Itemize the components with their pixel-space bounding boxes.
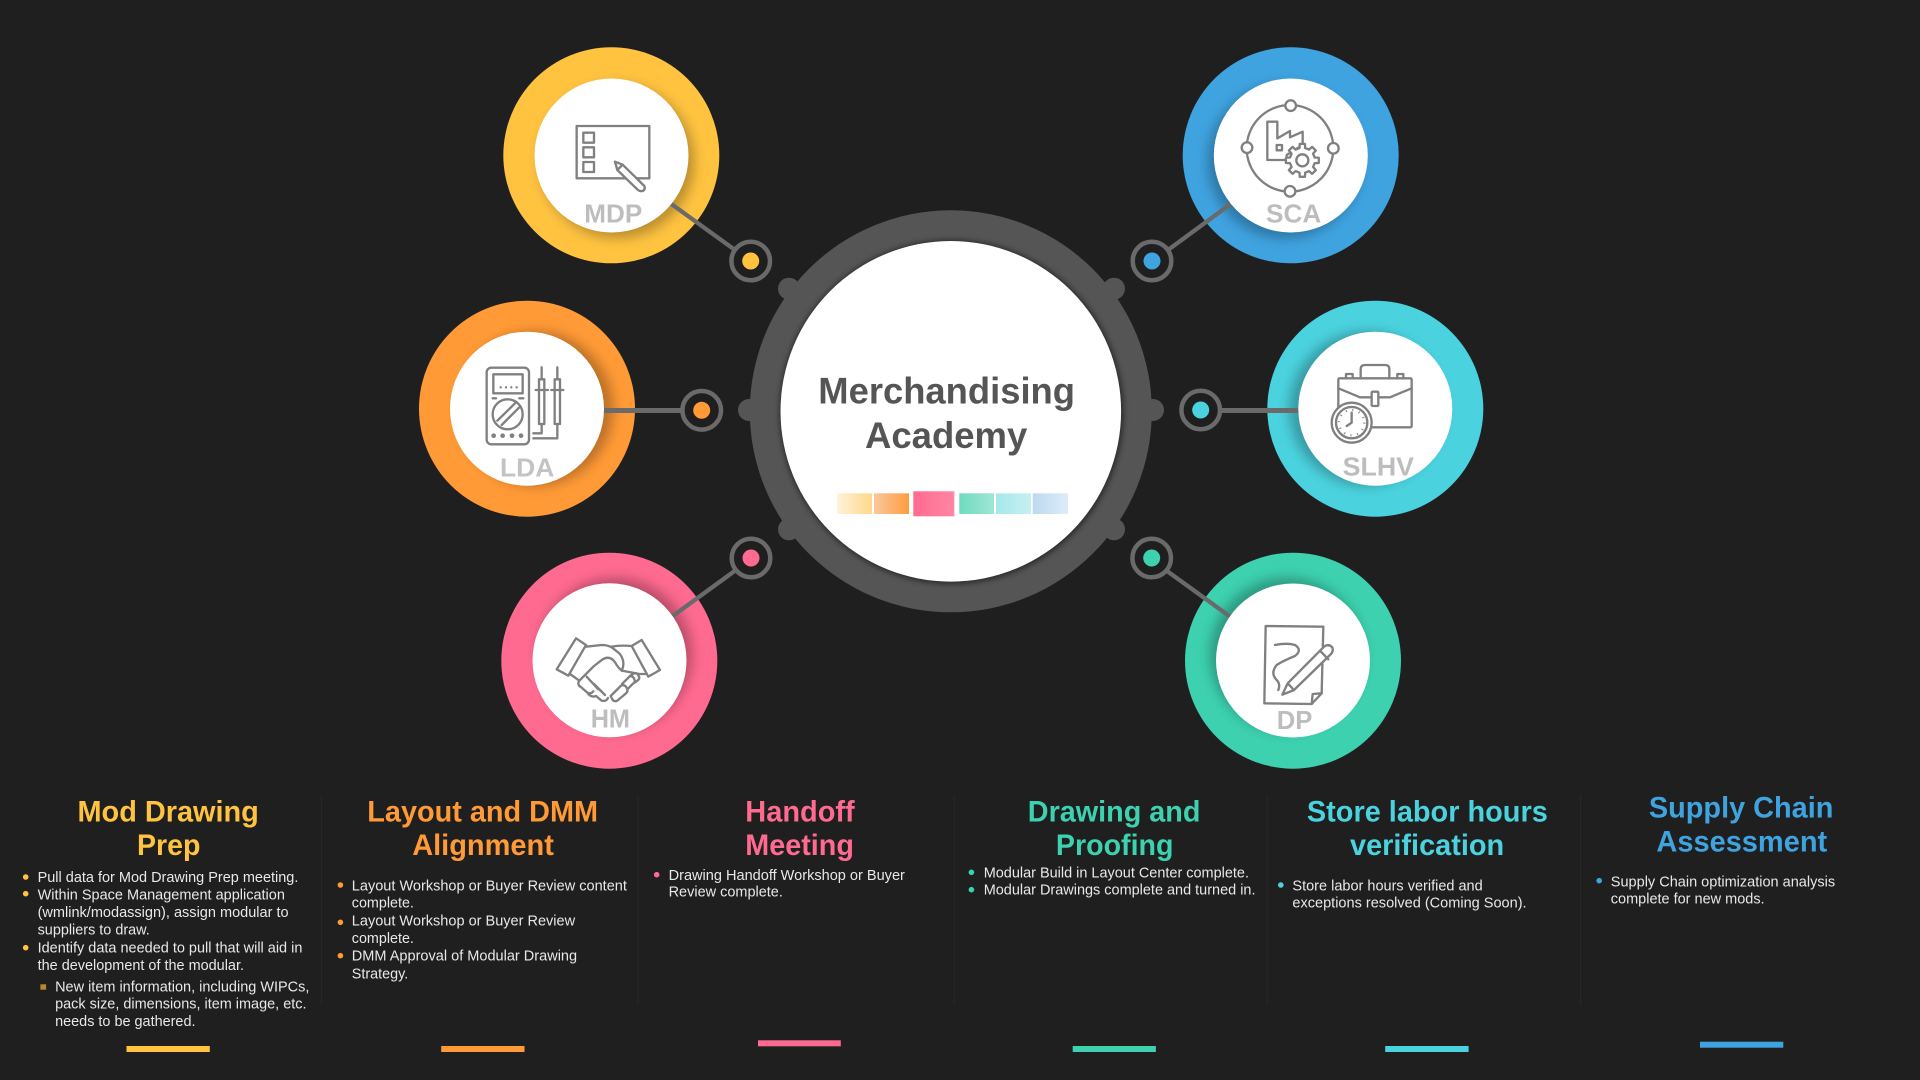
bullet list: DMM Approval of Modular Drawing xyxy=(352,949,577,965)
label: SLHV: SLHV xyxy=(1343,451,1415,481)
icon: tablet with stylus xyxy=(577,126,649,191)
panel: Layout and DMM Alignment xyxy=(338,796,627,1052)
icon: signed document with pen xyxy=(1264,626,1333,704)
node: MDP xyxy=(503,47,770,280)
bullet list: (wmlink/modassign), assign modular to xyxy=(38,905,289,921)
heading: Store labor hours verification: Store labor hours xyxy=(1307,796,1548,829)
bullet list: Supply Chain optimization analysis xyxy=(1611,875,1835,891)
bullet list: Store labor hours verified and xyxy=(1292,879,1483,895)
bullet list: Pull data for Mod Drawing Prep meeting. xyxy=(38,870,298,886)
heading: Supply Chain Assessment: Supply Chain xyxy=(1649,791,1833,824)
bullet list: needs to be gathered. xyxy=(55,1014,195,1030)
bullet list: Review complete. xyxy=(669,885,783,901)
bullet list: suppliers to draw. xyxy=(38,923,150,939)
connector dot: HM xyxy=(732,539,770,577)
bullet list: Layout Workshop or Buyer Review content xyxy=(352,879,627,895)
accent bar xyxy=(126,1046,210,1052)
accent bar xyxy=(758,1040,841,1046)
bullet list: Strategy. xyxy=(352,966,408,982)
connector dot: LDA xyxy=(682,391,721,430)
panel: Supply Chain Assessment xyxy=(1596,791,1835,1048)
label: DP: DP xyxy=(1277,705,1312,735)
heading: Layout and DMM Alignment: Alignment xyxy=(412,829,554,862)
panel: Handoff Meeting xyxy=(654,796,905,1046)
heading: Drawing and Proofing: Proofing xyxy=(1056,829,1174,862)
hub ring with knobs xyxy=(738,210,1164,612)
accent bar xyxy=(1073,1046,1156,1052)
label: MDP: MDP xyxy=(584,199,642,229)
node: HM xyxy=(501,539,770,769)
bullet list: Drawing Handoff Workshop or Buyer xyxy=(669,868,905,884)
bullet list: Modular Drawings complete and turned in. xyxy=(984,882,1256,898)
bullet list: the development of the modular. xyxy=(38,958,244,974)
connector dot: DP xyxy=(1132,539,1171,577)
connector: HM xyxy=(670,570,736,618)
connector: MDP xyxy=(670,203,735,250)
bullet list: Layout Workshop or Buyer Review xyxy=(352,913,576,929)
accent bar xyxy=(441,1046,524,1052)
heading: Drawing and Proofing: Drawing and xyxy=(1028,796,1200,829)
bullet list: exceptions resolved (Coming Soon). xyxy=(1292,895,1527,911)
bullet list: New item information, including WIPCs, xyxy=(55,980,309,996)
connector dot: SLHV xyxy=(1181,391,1220,429)
heading: Handoff Meeting: Handoff xyxy=(745,796,856,829)
central hub: Merchandising Academy xyxy=(738,210,1164,612)
node: SCA xyxy=(1133,47,1399,280)
heading: Supply Chain Assessment: Assessment xyxy=(1656,825,1827,858)
node: SLHV xyxy=(1181,301,1483,517)
heading: Handoff Meeting: Meeting xyxy=(745,829,854,862)
panel: Mod Drawing Prep xyxy=(23,796,309,1052)
node: DP xyxy=(1132,539,1401,769)
heading: Mod Drawing Prep: Prep xyxy=(137,829,200,862)
label: LDA: LDA xyxy=(500,453,555,483)
bullet list: pack size, dimensions, item image, etc. xyxy=(55,996,306,1012)
bullet list xyxy=(338,879,627,982)
icon: multimeter xyxy=(487,367,563,444)
bullet list xyxy=(1596,875,1835,907)
bullet list: Within Space Management application xyxy=(38,887,285,903)
connector dot: SCA xyxy=(1133,242,1171,280)
connector: SLHV xyxy=(1219,408,1302,413)
heading: Store labor hours verification: verification xyxy=(1350,829,1504,862)
heading: Mod Drawing Prep: Mod Drawing xyxy=(78,796,259,829)
bullet list: Modular Build in Layout Center complete. xyxy=(984,866,1249,882)
bullet list xyxy=(1278,879,1527,911)
accent bar xyxy=(1385,1046,1469,1052)
bullet list: Identify data needed to pull that will aid in xyxy=(38,940,302,956)
label: SCA: SCA xyxy=(1266,199,1322,229)
icon: briefcase with clock xyxy=(1332,365,1412,443)
bullet list xyxy=(969,866,1256,898)
bullet list: complete. xyxy=(352,896,414,912)
bullet list xyxy=(23,870,309,1030)
icon: handshake xyxy=(557,638,660,701)
panel: Store labor hours verification xyxy=(1278,796,1548,1052)
connector: SCA xyxy=(1168,203,1232,250)
heading: Layout and DMM Alignment: Layout and DMM xyxy=(367,796,598,829)
bullet list xyxy=(654,868,905,901)
bullet list: complete for new mods. xyxy=(1611,891,1765,907)
hub title: Academy xyxy=(865,415,1028,456)
connector dot: MDP xyxy=(731,242,770,280)
accent bar xyxy=(1700,1042,1783,1048)
connector: DP xyxy=(1167,571,1232,618)
hub title: Merchandising xyxy=(818,371,1075,412)
node: LDA xyxy=(419,301,721,517)
connector: LDA xyxy=(600,408,684,413)
bullet list: complete. xyxy=(352,931,414,947)
colour swatch strip xyxy=(837,491,1068,516)
label: HM: HM xyxy=(591,703,630,733)
panel: Drawing and Proofing xyxy=(969,796,1256,1052)
hub white disc xyxy=(780,241,1121,582)
icon: factory with gear xyxy=(1242,100,1339,197)
